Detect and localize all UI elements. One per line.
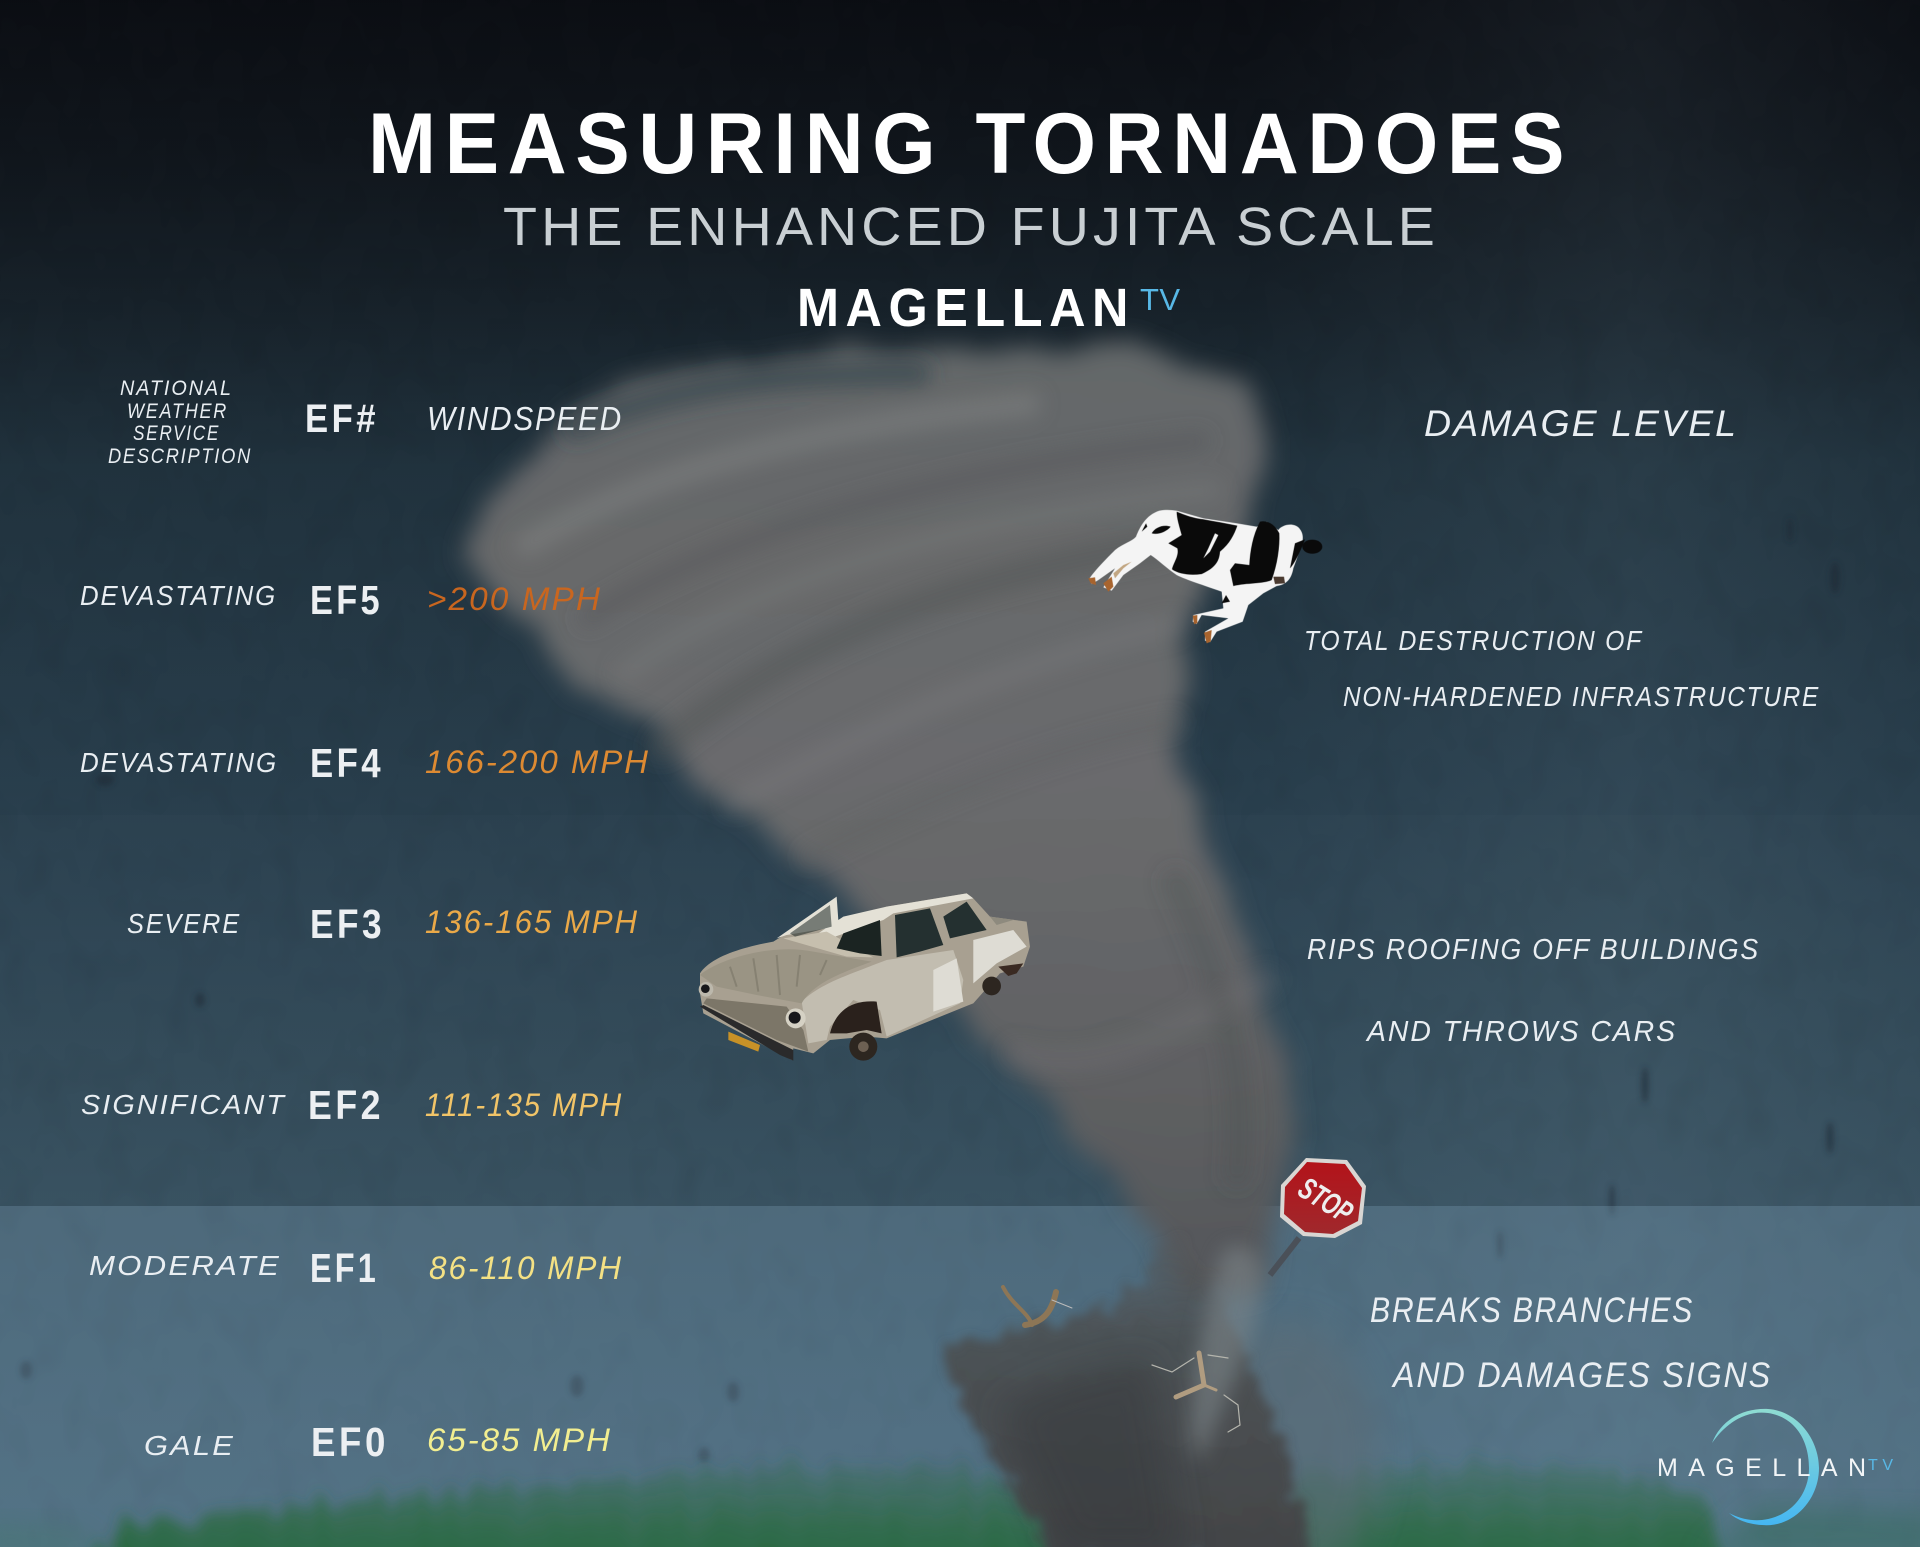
icon: flying cow	[1088, 510, 1322, 643]
damage text: medium: AND THROWS CARS	[1365, 1016, 1677, 1048]
row: EF2	[81, 1082, 623, 1128]
column header: damage level: DAMAGE LEVEL	[1424, 403, 1738, 444]
damage text: low: BREAKS BRANCHES	[1370, 1291, 1694, 1330]
damage text: high: NON-HARDENED INFRASTRUCTURE	[1343, 681, 1820, 712]
column header: description: NATIONAL	[120, 377, 233, 400]
column header: description: WEATHER	[127, 400, 228, 423]
grass	[0, 1465, 1920, 1547]
damage text: low: AND DAMAGES SIGNS	[1391, 1356, 1772, 1395]
debris halo	[1194, 1322, 1378, 1547]
row: EF3: EF3	[310, 901, 385, 947]
row: EF3: SEVERE	[127, 908, 241, 939]
row: EF2: 111-135 MPH	[425, 1087, 623, 1123]
logo: Magellan TV	[1657, 1409, 1893, 1525]
row: EF4	[80, 740, 650, 786]
title: MEASURING TORNADOES	[368, 96, 1573, 192]
brand heading: TV	[1140, 282, 1180, 317]
row: EF4: DEVASTATING	[80, 747, 278, 778]
column header: description: DESCRIPTION	[108, 445, 252, 468]
icon: stop sign	[1270, 1158, 1366, 1275]
row: EF5: EF5	[310, 577, 383, 623]
row: EF5: DEVASTATING	[80, 580, 277, 611]
row: EF3: 136-165 MPH	[425, 904, 639, 940]
column header: windspeed: WINDSPEED	[427, 400, 623, 437]
damage text: medium: RIPS ROOFING OFF BUILDINGS	[1307, 934, 1760, 966]
column header: EF number: EF#	[305, 397, 379, 441]
row: EF2: EF2	[308, 1082, 384, 1128]
row: EF2: SIGNIFICANT	[81, 1089, 286, 1120]
icon: wrecked car	[699, 893, 1030, 1061]
column header: description	[108, 377, 252, 468]
row: EF0: 65-85 MPH	[427, 1422, 612, 1458]
row: EF1	[89, 1245, 623, 1291]
damage text: high	[1304, 625, 1820, 712]
damage text: high: TOTAL DESTRUCTION OF	[1304, 625, 1643, 656]
cloud streaks	[527, 373, 1267, 1176]
row: EF5	[80, 577, 602, 623]
tornado	[457, 346, 1378, 1547]
icon: flying branch	[1003, 1287, 1072, 1325]
lower lighter band	[0, 1206, 1920, 1547]
row: EF3	[127, 901, 639, 947]
row: EF4: EF4	[310, 740, 384, 786]
row: EF0: GALE	[144, 1430, 235, 1461]
icon: stop sign: STOP	[1292, 1170, 1359, 1230]
damage text: low	[1370, 1291, 1772, 1395]
brand heading: MAGELLAN	[797, 278, 1135, 338]
column header: description: SERVICE	[133, 422, 220, 445]
damage text: medium	[1307, 934, 1760, 1048]
row: EF5: >200 MPH	[427, 581, 602, 617]
icon: broken twig	[1152, 1353, 1240, 1432]
row: EF1: MODERATE	[89, 1250, 281, 1281]
debris cloud	[943, 1237, 1308, 1547]
subtitle: THE ENHANCED FUJITA SCALE	[503, 197, 1439, 257]
logo: Magellan TV: MAGELLAN	[1657, 1454, 1866, 1482]
row: EF0: EF0	[311, 1419, 389, 1465]
logo: Magellan TV: TV	[1868, 1457, 1893, 1474]
row: EF0	[144, 1419, 612, 1465]
row: EF4: 166-200 MPH	[425, 744, 650, 780]
funnel cloud	[457, 346, 1291, 1298]
row: EF1: 86-110 MPH	[429, 1250, 623, 1286]
row: EF1: EF1	[310, 1245, 379, 1291]
